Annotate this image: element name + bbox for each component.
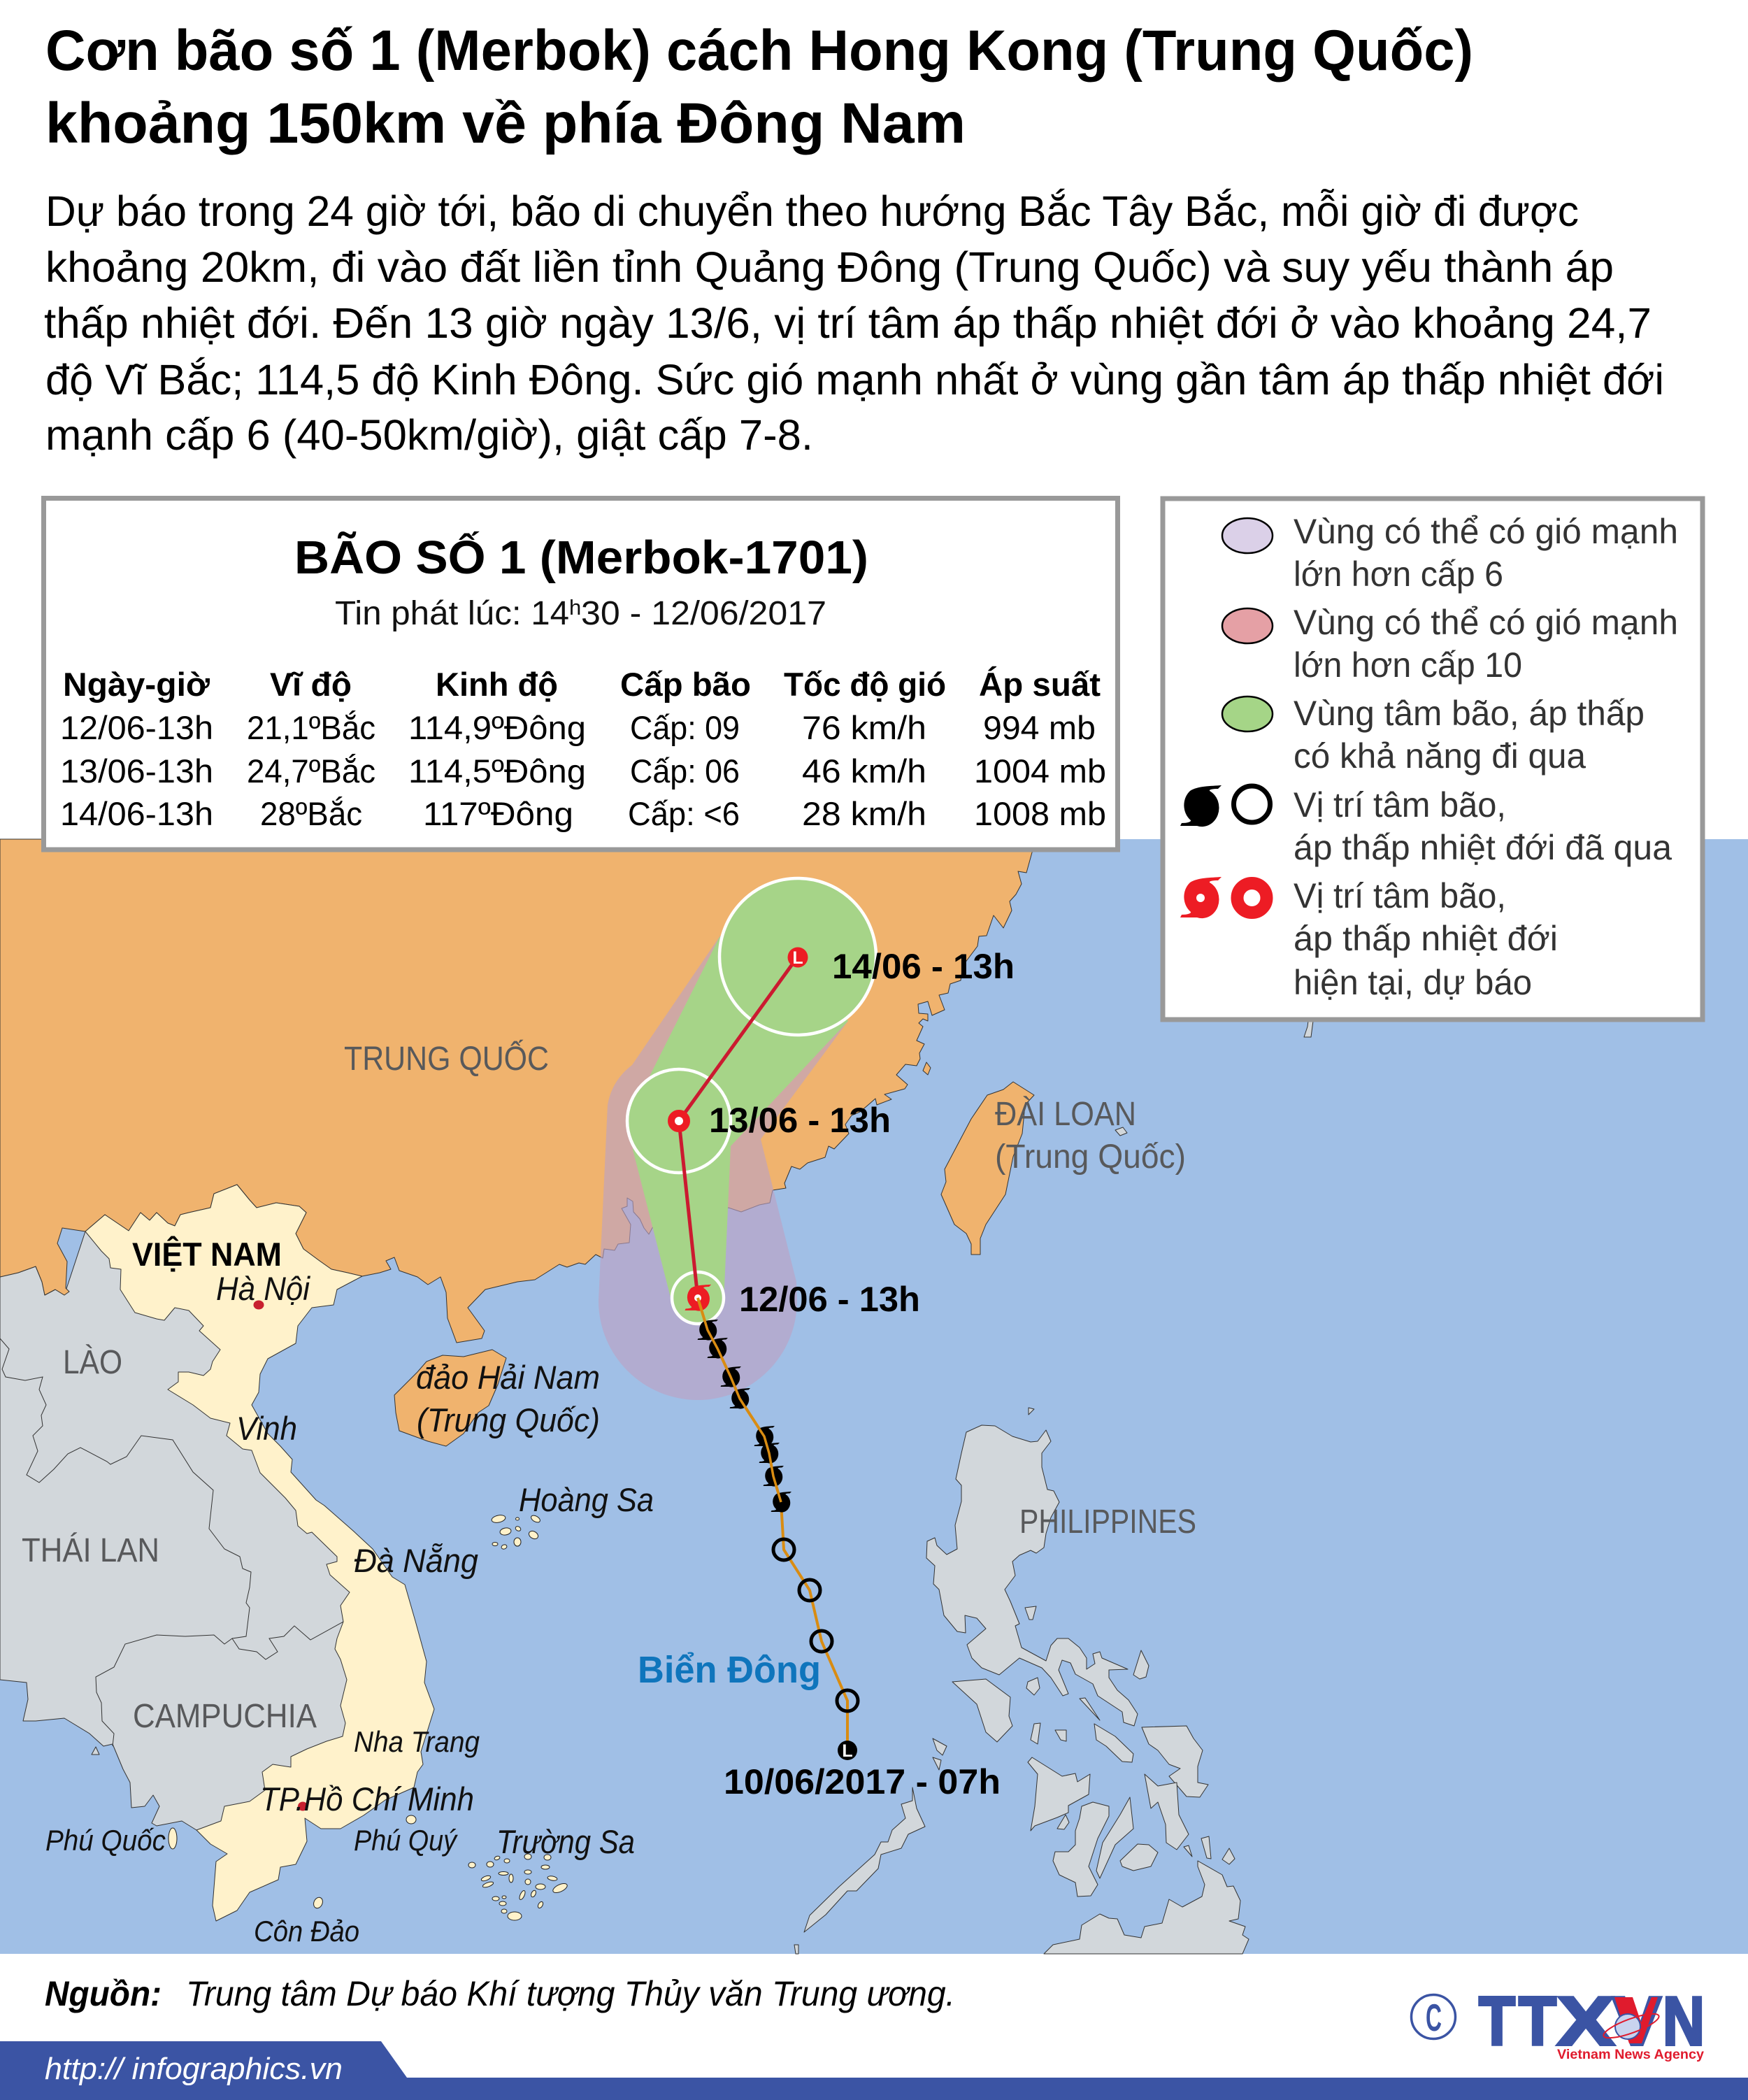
- Hoàng Sa islands: [491, 1514, 541, 1550]
- table row 14/06: 1008 mb: [974, 795, 1106, 832]
- table row 12/06: [60, 709, 1096, 746]
- logo: TTXVN: T: [1519, 1983, 1556, 2059]
- legend item: past positions: Vị trí tâm bão,: [1294, 785, 1506, 824]
- place labels: TP.Hồ Chí Minh: [260, 1780, 474, 1817]
- table row 14/06: Cấp: <6: [628, 795, 740, 832]
- footer URL: http:// infographics.vn: [45, 2052, 343, 2086]
- logo: TTXVN: X: [1557, 1983, 1614, 2059]
- legend item: storm centre zone: [1222, 694, 1645, 776]
- legend item: current and forecast positions: áp thấp nhiệt đới: [1294, 919, 1558, 958]
- logo: TTXVN: N: [1663, 1983, 1705, 2059]
- issue time: h: [569, 595, 581, 620]
- table frame: [43, 498, 1117, 850]
- legend frame: [1163, 499, 1703, 1020]
- small coastal islands: [92, 1021, 1313, 1954]
- country labels: [22, 1039, 1196, 1735]
- intro text block: mạnh cấp 6 (40-50km/giờ), giật cấp 7-8.: [45, 411, 813, 459]
- country labels: CAMPUCHIA: [133, 1698, 317, 1735]
- legend item: wind above level 6: Vùng có thể có gió mạnh: [1294, 512, 1678, 551]
- place labels: (Trung Quốc): [417, 1401, 600, 1438]
- logo: TTXVN: [1479, 1983, 1705, 2062]
- table header row: [63, 666, 1101, 703]
- place labels: Phú Quốc: [45, 1824, 166, 1857]
- table row 12/06: Cấp: 09: [630, 709, 740, 746]
- table header row: Tốc độ gió: [784, 666, 946, 703]
- land: China mainland: [0, 839, 1036, 1343]
- footer band: [0, 2041, 1748, 2100]
- title: Cơn bão số 1 (Merbok) cách Hong Kong (Trung Quốc): [45, 19, 1473, 83]
- place labels: Hà Nội: [216, 1270, 310, 1307]
- title: [45, 19, 1473, 155]
- past storm positions: [698, 1320, 791, 1513]
- logo red V accent: [1614, 1997, 1658, 2043]
- table row 13/06: 24,7ºBắc: [247, 752, 375, 790]
- table row 13/06: Cấp: 06: [630, 752, 740, 790]
- sea background: [0, 839, 1748, 1954]
- other Vietnamese islands: [169, 1815, 416, 1910]
- country labels: THÁI LAN: [22, 1532, 159, 1569]
- logo: TTXVN: V: [1612, 1983, 1661, 2059]
- table row 12/06: 114,9ºĐông: [408, 709, 586, 746]
- current position storm icon: [685, 1285, 711, 1311]
- land: Hainan: [394, 1350, 506, 1446]
- table row 13/06: 46 km/h: [802, 752, 926, 790]
- Trường Sa islands: [468, 1854, 568, 1920]
- intro text block: khoảng 20km, đi vào đất liền tỉnh Quảng Đông (Trung Quốc) và suy yếu thành áp: [45, 243, 1614, 291]
- place labels: Đà Nẵng: [354, 1542, 478, 1579]
- logo: copyright mark: [1411, 1994, 1456, 2039]
- storm date labels: [709, 947, 1015, 1801]
- panel: legend: [1163, 499, 1703, 1020]
- issue time: Tin phát lúc: 14: [335, 595, 569, 632]
- track segments over icons: [698, 1298, 781, 1502]
- place labels: Nha Trang: [354, 1725, 480, 1758]
- map: [0, 839, 1748, 1954]
- legend item: wind above level 10: [1222, 603, 1678, 685]
- table header row: Cấp bão: [620, 666, 751, 703]
- logo: copyright mark: C: [1426, 1996, 1442, 2039]
- logo tagline: Vietnam News Agency: [1557, 2048, 1704, 2062]
- place labels: Phú Quý: [354, 1824, 459, 1857]
- table row 13/06: 13/06-13h: [60, 752, 213, 790]
- table header row: Kinh độ: [436, 666, 558, 703]
- storm date labels: 12/06 - 13h: [739, 1280, 920, 1319]
- start marker L: L: [842, 1741, 853, 1761]
- start marker L: [838, 1741, 857, 1761]
- intro text block: [44, 187, 1664, 459]
- table row 12/06: 994 mb: [983, 709, 1096, 746]
- legend item: current and forecast positions: hiện tại, dự báo: [1294, 963, 1532, 1002]
- table row 13/06: [60, 752, 1106, 790]
- legend item: wind above level 6: [1222, 512, 1678, 594]
- table row 12/06: 12/06-13h: [60, 709, 213, 746]
- legend item: current and forecast positions: [1180, 876, 1558, 1002]
- legend item: wind above level 10: lớn hơn cấp 10: [1294, 645, 1522, 685]
- issue time: [335, 595, 826, 632]
- panel: storm data table: [43, 498, 1117, 850]
- legend item: wind above level 6: lớn hơn cấp 6: [1294, 555, 1503, 594]
- legend item: current and forecast positions: Vị trí tâm bão,: [1294, 876, 1506, 915]
- legend item: storm centre zone: Vùng tâm bão, áp thấp: [1294, 694, 1645, 733]
- forecast position 14/06 marker L: L: [792, 948, 803, 968]
- source line: Trung tâm Dự báo Khí tượng Thủy văn Trung ương.: [186, 1974, 955, 2013]
- table title: BÃO SỐ 1 (Merbok-1701): [294, 531, 868, 584]
- issue time: 30 - 12/06/2017: [581, 595, 826, 632]
- place labels: Vinh: [236, 1410, 297, 1447]
- table row 13/06: 1004 mb: [974, 752, 1106, 790]
- forecast position 13/06: [671, 1113, 687, 1129]
- past depression rings: [773, 1539, 858, 1711]
- table row 14/06: [60, 795, 1106, 832]
- storm date labels: 13/06 - 13h: [709, 1101, 891, 1140]
- logo orbit: [1601, 2009, 1661, 2043]
- land: Laos, Thailand, Cambodia: [0, 1231, 371, 1832]
- table row 12/06: 76 km/h: [802, 709, 926, 746]
- land: Vietnam: [85, 1185, 434, 1921]
- sea label: Biển Đông: [638, 1649, 821, 1691]
- table header row: Ngày-giờ: [63, 666, 210, 703]
- intro text block: Dự báo trong 24 giờ tới, bão di chuyển theo hướng Bắc Tây Bắc, mỗi giờ đi được: [45, 187, 1579, 235]
- logo globe: [1615, 2014, 1640, 2039]
- logo: TTXVN: T: [1479, 1983, 1515, 2059]
- land: Taiwan: [941, 1082, 1034, 1255]
- table row 13/06: 114,5ºĐông: [408, 752, 586, 790]
- table header row: Áp suất: [979, 666, 1101, 703]
- storm date labels: 10/06/2017 - 07h: [724, 1762, 1001, 1801]
- table row 12/06: 21,1ºBắc: [247, 709, 375, 746]
- country labels: (Trung Quốc): [995, 1138, 1186, 1176]
- legend item: past positions: [1180, 785, 1672, 867]
- place labels: đảo Hải Nam: [416, 1359, 600, 1396]
- land: Philippines: [804, 1425, 1249, 1954]
- table row 14/06: 28 km/h: [802, 795, 926, 832]
- city dot: TP.Hồ Chí Minh: [298, 1801, 308, 1811]
- intro text block: độ Vĩ Bắc; 114,5 độ Kinh Đông. Sức gió mạnh nhất ở vùng gần tâm áp thấp nhiệt đới: [45, 356, 1664, 403]
- table row 14/06: 117ºĐông: [423, 795, 573, 832]
- country labels: LÀO: [63, 1344, 122, 1381]
- storm centre zone: green cone: [627, 878, 876, 1324]
- table header row: Vĩ độ: [270, 666, 352, 703]
- forecast position 14/06 marker L: [787, 947, 808, 968]
- table row 14/06: 28ºBắc: [260, 795, 362, 832]
- place labels: [45, 1270, 654, 1948]
- country labels: TRUNG QUỐC: [344, 1039, 549, 1078]
- forecast track: [679, 957, 798, 1298]
- place labels: Hoàng Sa: [519, 1481, 654, 1518]
- storm date labels: 14/06 - 13h: [832, 947, 1015, 986]
- table row 14/06: 14/06-13h: [60, 795, 213, 832]
- source line: Nguồn:: [45, 1974, 162, 2013]
- intro text block: thấp nhiệt đới. Đến 13 giờ ngày 13/6, vị trí tâm áp thấp nhiệt đới ở vào khoảng 24,7: [44, 299, 1652, 347]
- wind zone: lavender cone: [599, 936, 848, 1400]
- title: khoảng 150km về phía Đông Nam: [45, 92, 966, 155]
- legend item: past positions: áp thấp nhiệt đới đã qua: [1294, 828, 1672, 867]
- legend item: wind above level 10: Vùng có thể có gió mạnh: [1294, 603, 1678, 642]
- country labels: ĐÀI LOAN: [995, 1096, 1136, 1133]
- place labels: Côn Đảo: [254, 1915, 359, 1948]
- country labels: PHILIPPINES: [1019, 1503, 1196, 1541]
- border lines: Laos, Thailand, Cambodia: [0, 1338, 343, 1746]
- place labels: Trường Sa: [496, 1823, 635, 1860]
- legend item: storm centre zone: có khả năng đi qua: [1294, 736, 1586, 776]
- Vietnam label: VIỆT NAM: [132, 1236, 282, 1273]
- past track: [698, 1298, 847, 1750]
- city dot: Hà Nội: [253, 1301, 264, 1309]
